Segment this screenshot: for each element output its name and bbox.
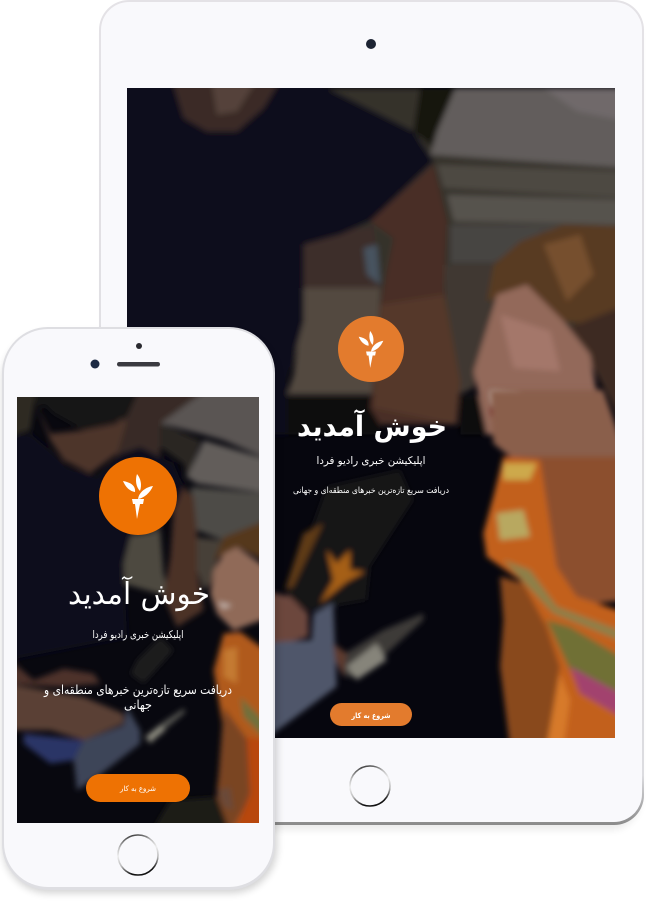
tablet heading: خوش آمدید bbox=[297, 409, 447, 443]
phone body bbox=[2, 327, 277, 893]
phone screen photo bbox=[17, 397, 259, 823]
icon: phone home button bbox=[118, 835, 158, 875]
phone description bbox=[43, 682, 232, 713]
phone heading: خوش آمدید bbox=[68, 576, 210, 612]
phone logo bbox=[99, 457, 177, 535]
phone description: دریافت سریع تازه‌ترین خبرهای منطقه‌ای و bbox=[43, 682, 232, 698]
tablet start button bbox=[330, 703, 412, 726]
icon: phone front camera bbox=[90, 360, 100, 368]
tablet subtitle: اپلیکیشن خبری رادیو فردا bbox=[316, 455, 426, 467]
phone start button bbox=[86, 774, 190, 802]
tablet body bbox=[99, 0, 644, 830]
tablet description: دریافت سریع تازه‌ترین خبرهای منطقه‌ای و جهانی bbox=[293, 486, 449, 496]
tablet screen photo bbox=[114, 75, 627, 747]
icon: tablet camera bbox=[366, 39, 376, 49]
phone start button: شروع به کار bbox=[119, 784, 156, 793]
phone description: جهانی bbox=[124, 697, 152, 713]
tablet logo bbox=[338, 316, 404, 382]
icon: phone sensor bbox=[136, 343, 142, 349]
icon: phone speaker bbox=[117, 362, 160, 366]
phone device bbox=[2, 327, 277, 893]
tablet start button: شروع به کار bbox=[351, 711, 390, 720]
icon: tablet home button bbox=[350, 766, 390, 806]
tablet device bbox=[99, 0, 644, 830]
phone subtitle: اپلیکیشن خبری رادیو فردا bbox=[92, 629, 184, 641]
